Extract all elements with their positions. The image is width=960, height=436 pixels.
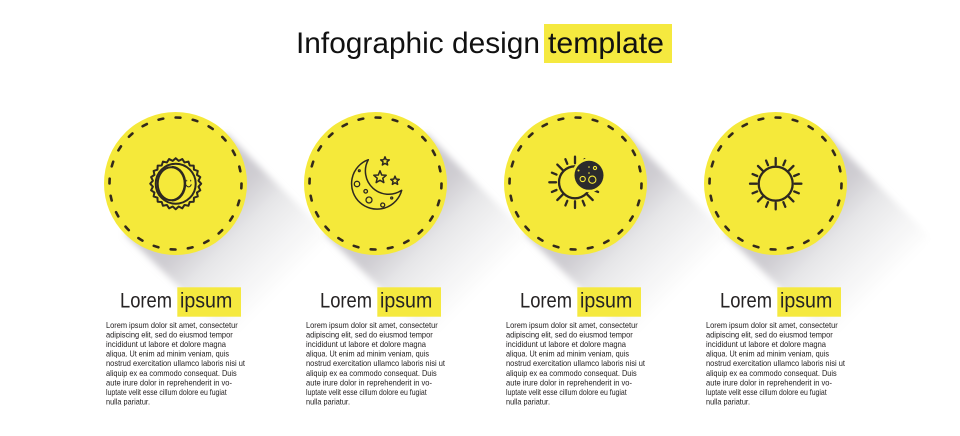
title: Infographic design: [296, 27, 540, 60]
text block 4: nostrud exercitation ullamco laboris nisi ut: [706, 358, 846, 368]
yellow dashed circle 1: [104, 112, 247, 255]
heading 3: ipsum: [580, 288, 632, 312]
text block 2: adipiscing elit, sed do eiusmod tempor: [306, 330, 433, 340]
text block 2: [306, 320, 446, 406]
heading 4: [720, 287, 841, 317]
icon: sun partly covered by dark moon: [549, 157, 606, 208]
long shadow: circle 3: [525, 133, 756, 363]
panel: moon and stars: [304, 112, 447, 406]
long shadow: circle 4: [725, 133, 956, 363]
icon: smiling moon inside sun: [150, 158, 201, 209]
text block 3: incididunt ut labore et dolore magna: [506, 339, 626, 349]
text block 4: adipiscing elit, sed do eiusmod tempor: [706, 330, 833, 340]
panel: eclipse sun with moon: [104, 112, 247, 406]
text block 3: Lorem ipsum dolor sit amet, consectetur: [506, 320, 638, 330]
text block 1: incididunt ut labore et dolore magna: [106, 339, 226, 349]
text block 1: aliqua. Ut enim ad minim veniam, quis: [106, 349, 229, 359]
text block 4: Lorem ipsum dolor sit amet, consectetur: [706, 320, 838, 330]
text block 3: aute irure dolor in reprehenderit in vo-: [506, 377, 632, 387]
heading 2: Lorem: [320, 288, 372, 312]
text block 1: aliquip ex ea commodo consequat. Duis: [106, 368, 237, 378]
text block 3: nulla pariatur.: [506, 396, 550, 406]
text block 2: nostrud exercitation ullamco laboris nisi ut: [306, 358, 446, 368]
text block 1: [106, 320, 246, 406]
text block 3: aliqua. Ut enim ad minim veniam, quis: [506, 349, 629, 359]
text block 4: incididunt ut labore et dolore magna: [706, 339, 826, 349]
heading 1: Lorem: [120, 288, 172, 312]
text block 1: nostrud exercitation ullamco laboris nisi ut: [106, 358, 246, 368]
title: template: [548, 27, 664, 60]
text block 4: [706, 320, 846, 406]
text block 2: aliquip ex ea commodo consequat. Duis: [306, 368, 437, 378]
text block 2: Lorem ipsum dolor sit amet, consectetur: [306, 320, 438, 330]
text block 4: luptate velit esse cillum dolore eu fugiat: [706, 387, 827, 397]
text block 2: aliqua. Ut enim ad minim veniam, quis: [306, 349, 429, 359]
text block 2: aute irure dolor in reprehenderit in vo-: [306, 377, 432, 387]
text block 3: nostrud exercitation ullamco laboris nisi ut: [506, 358, 646, 368]
text block 2: nulla pariatur.: [306, 396, 350, 406]
text block 4: aute irure dolor in reprehenderit in vo-: [706, 377, 832, 387]
yellow dashed circle 2: [304, 112, 447, 255]
text block 1: aute irure dolor in reprehenderit in vo-: [106, 377, 232, 387]
text block 1: luptate velit esse cillum dolore eu fugiat: [106, 387, 227, 397]
yellow dashed circle 4: [704, 112, 847, 255]
text block 4: nulla pariatur.: [706, 396, 750, 406]
text block 1: nulla pariatur.: [106, 396, 150, 406]
heading 3: Lorem: [520, 288, 572, 312]
text block 3: luptate velit esse cillum dolore eu fugiat: [506, 387, 627, 397]
long shadow: circle 2: [325, 133, 556, 363]
title: [296, 24, 672, 63]
text block 4: aliquip ex ea commodo consequat. Duis: [706, 368, 837, 378]
heading 2: ipsum: [380, 288, 432, 312]
text block 3: aliquip ex ea commodo consequat. Duis: [506, 368, 637, 378]
heading 1: ipsum: [180, 288, 232, 312]
text block 1: adipiscing elit, sed do eiusmod tempor: [106, 330, 233, 340]
text block 4: aliqua. Ut enim ad minim veniam, quis: [706, 349, 829, 359]
heading 2: [320, 287, 441, 317]
icon: sun with rays: [750, 158, 801, 209]
text block 2: luptate velit esse cillum dolore eu fugiat: [306, 387, 427, 397]
long shadow: circle 1: [125, 133, 356, 363]
text block 3: adipiscing elit, sed do eiusmod tempor: [506, 330, 633, 340]
text block 2: incididunt ut labore et dolore magna: [306, 339, 426, 349]
heading 1: [120, 287, 241, 317]
heading 4: ipsum: [780, 288, 832, 312]
heading 4: Lorem: [720, 288, 772, 312]
heading 3: [520, 287, 641, 317]
icon: crescent moon with stars: [352, 157, 402, 209]
yellow dashed circle 3: [504, 112, 647, 255]
text block 3: [506, 320, 646, 406]
panel: sun: [704, 112, 847, 406]
text block 1: Lorem ipsum dolor sit amet, consectetur: [106, 320, 238, 330]
panel: solar eclipse: [504, 112, 647, 406]
